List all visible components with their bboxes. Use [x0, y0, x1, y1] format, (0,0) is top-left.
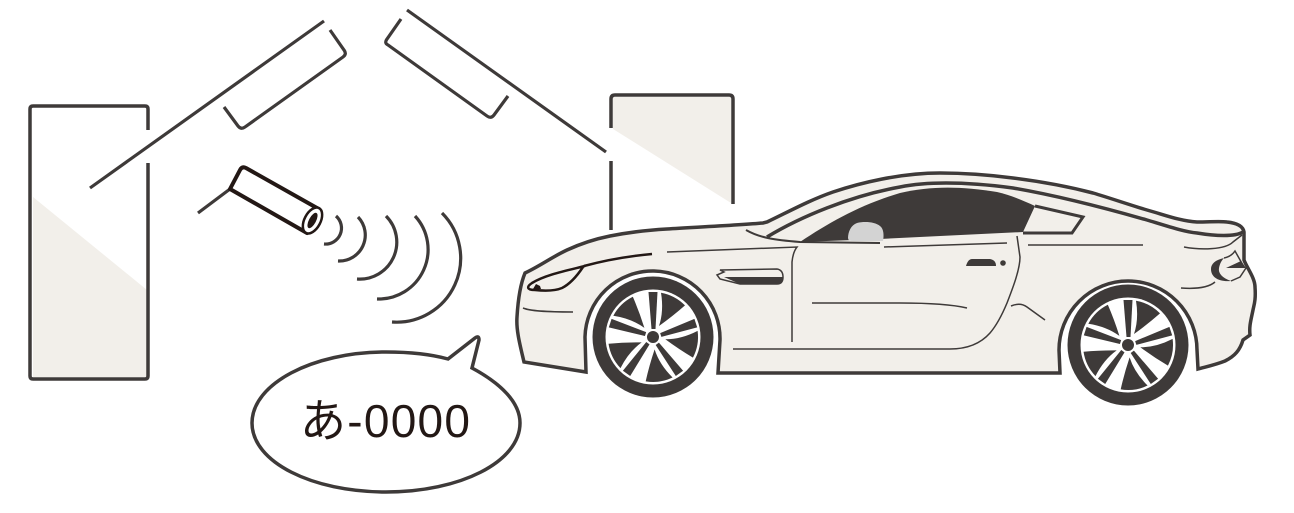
rear quarter window: [1023, 206, 1083, 233]
tail light: [1211, 251, 1246, 281]
rear wheel: [1068, 284, 1188, 406]
left door line and window: [90, 21, 345, 188]
car: [517, 173, 1255, 373]
speech bubble with plate number: [252, 337, 520, 492]
left pillar: [30, 106, 148, 379]
front wheel: [592, 276, 714, 398]
side vent: [717, 269, 783, 284]
plate number text: あ-0000: [300, 395, 470, 447]
signal waves: [324, 213, 461, 322]
windshield base: [746, 230, 880, 243]
right pillar: [611, 95, 733, 230]
side mirror: [848, 222, 884, 241]
icon: camera sensor: [198, 167, 326, 237]
side window glass: [800, 188, 1035, 242]
door and body detail lines: [523, 235, 1242, 349]
headlight: [528, 254, 652, 291]
right door line and window: [386, 10, 606, 152]
car body: [517, 173, 1255, 373]
door handle: [966, 259, 1006, 266]
roof inner line: [767, 183, 1243, 237]
